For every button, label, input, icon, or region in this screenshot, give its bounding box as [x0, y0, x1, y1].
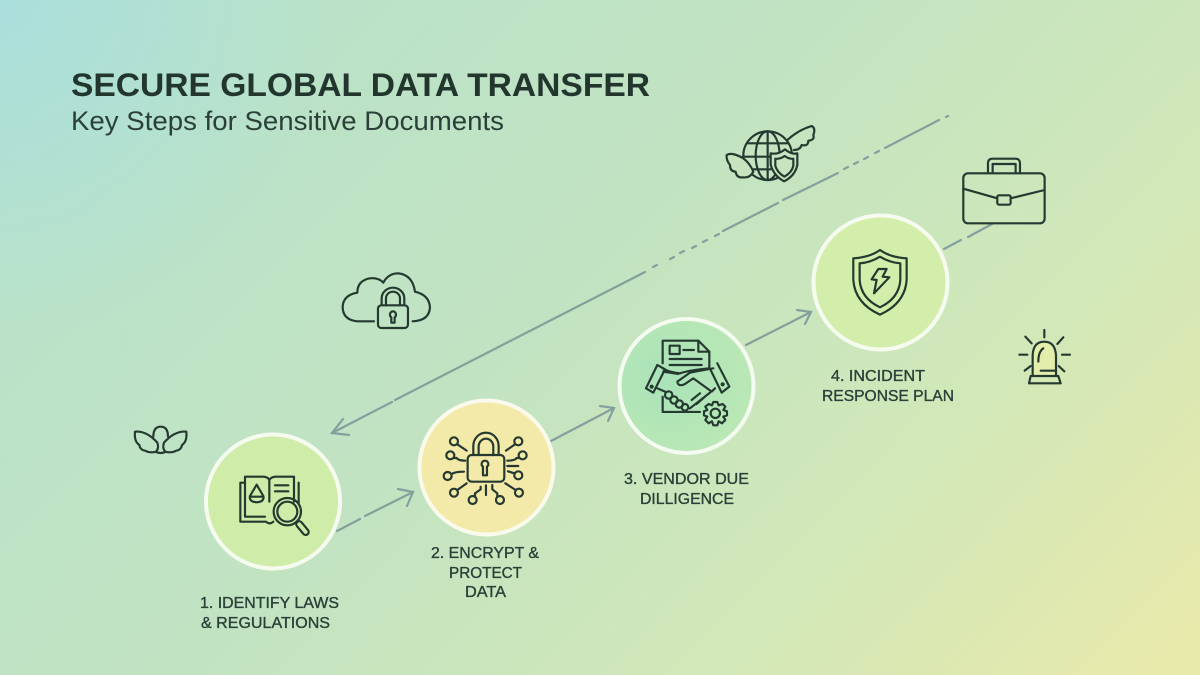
label: step 2: 2. ENCRYPT & — [431, 545, 540, 562]
step 1 circle — [206, 434, 340, 568]
icon: handshake with document and gear — [646, 341, 729, 425]
icon: shield with lightning bolt — [853, 250, 907, 315]
step 4 circle — [814, 216, 948, 350]
label: step 3: 3. VENDOR DUE — [624, 471, 749, 488]
icon: angel wings — [135, 427, 186, 453]
label: step 2: PROTECT — [449, 565, 523, 582]
icon: briefcase — [963, 159, 1045, 223]
label: step 1: & REGULATIONS — [201, 615, 330, 632]
label: step 3 — [624, 471, 749, 508]
step 3 circle — [620, 319, 754, 453]
panel: step 2 — [420, 400, 554, 601]
label: step 1 — [200, 595, 339, 632]
arrow: step 2 to 3 — [551, 406, 614, 441]
arrow: step 1 to 2 — [337, 489, 413, 531]
label: step 3: DILLIGENCE — [640, 491, 734, 508]
icon: alarm beacon — [1019, 330, 1070, 383]
icon: padlock with circuit nodes — [444, 433, 527, 504]
label: step 2 — [431, 545, 540, 601]
panel: step 4 — [814, 216, 954, 405]
label: step 2: DATA — [465, 584, 507, 601]
icon: law book and magnifier — [240, 477, 310, 536]
label: step 4 — [822, 368, 954, 405]
label: step 1: 1. IDENTIFY LAWS — [200, 595, 339, 612]
arrow: step 3 to 4 — [746, 310, 811, 345]
title: SECURE GLOBAL DATA TRANSFER — [71, 67, 650, 103]
arrow: long return path — [332, 116, 948, 435]
arrow: step 4 to briefcase — [944, 224, 992, 249]
icon: globe with shield and wings — [727, 126, 814, 181]
step 2 circle — [420, 400, 554, 534]
panel: step 3 — [620, 319, 754, 508]
icon: cloud with padlock — [343, 273, 430, 328]
subtitle: Key Steps for Sensitive Documents — [71, 106, 504, 136]
panel: step 1 — [200, 434, 340, 632]
label: step 4: RESPONSE PLAN — [822, 388, 954, 405]
label: step 4: 4. INCIDENT — [831, 368, 926, 385]
